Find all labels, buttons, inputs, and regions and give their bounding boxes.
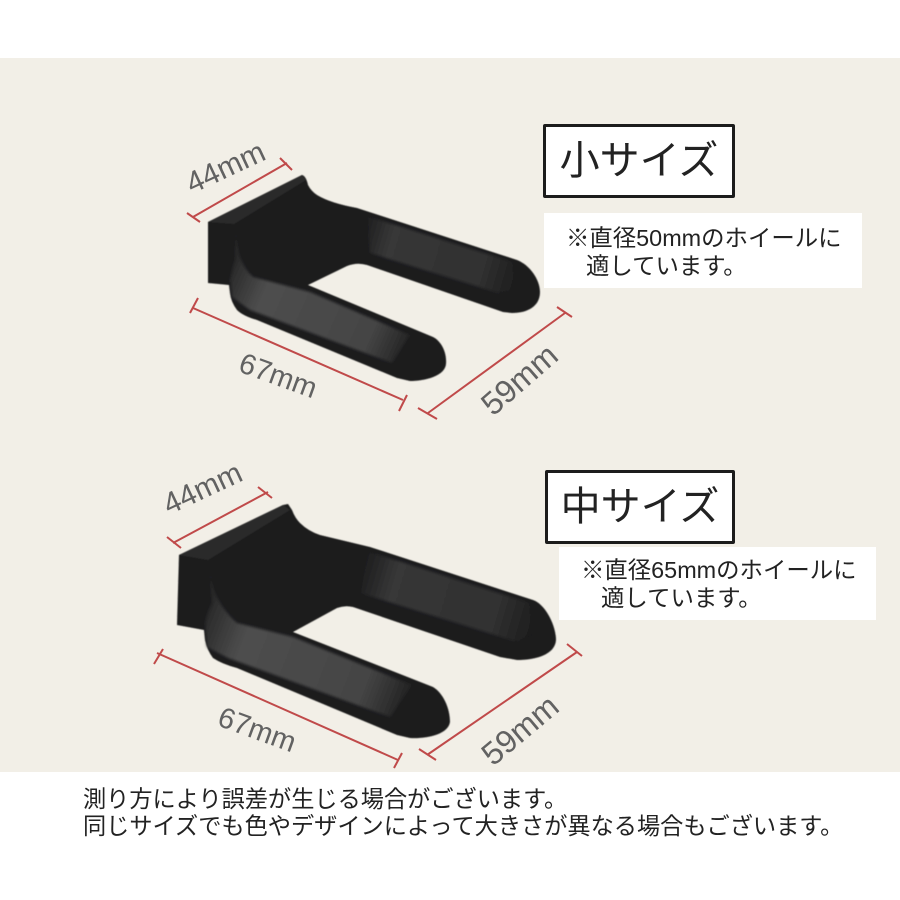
note: medium size: ※直径65mmのホイールに (581, 557, 857, 583)
note: small size: 適しています。 (586, 253, 747, 279)
footer disclaimer (83, 786, 843, 839)
dimension: medium 44mm: 44mm (158, 456, 248, 521)
dimension: medium 44mm (158, 456, 272, 548)
dimension: small 59mm (418, 307, 572, 422)
dimension: small 44mm (181, 135, 292, 222)
small bracket (208, 175, 540, 381)
dimension: medium 67mm: 67mm (214, 702, 300, 759)
heading: medium size (545, 470, 735, 544)
dimension: medium 67mm (154, 649, 402, 768)
background panel (0, 58, 900, 772)
heading: medium size: 中サイズ (561, 485, 719, 529)
footer disclaimer: 同じサイズでも色やデザインによって大きさが異なる場合もございます。 (83, 813, 843, 839)
note: small size (544, 213, 862, 288)
note: small size: ※直径50mmのホイールに (566, 225, 842, 251)
footer disclaimer: 測り方により誤差が生じる場合がございます。 (83, 786, 567, 812)
dimension: small 59mm: 59mm (474, 337, 565, 422)
dimension: medium 59mm (419, 644, 582, 772)
heading: small size: 小サイズ (560, 139, 718, 183)
heading: small size (543, 124, 735, 198)
note: medium size (559, 547, 876, 620)
note: medium size: 適しています。 (601, 585, 762, 611)
medium bracket (177, 504, 556, 738)
dimension: small 67mm: 67mm (235, 348, 321, 405)
dimension: small 67mm (190, 298, 407, 411)
dimension: small 44mm: 44mm (181, 135, 271, 200)
dimension: medium 59mm: 59mm (474, 688, 566, 772)
